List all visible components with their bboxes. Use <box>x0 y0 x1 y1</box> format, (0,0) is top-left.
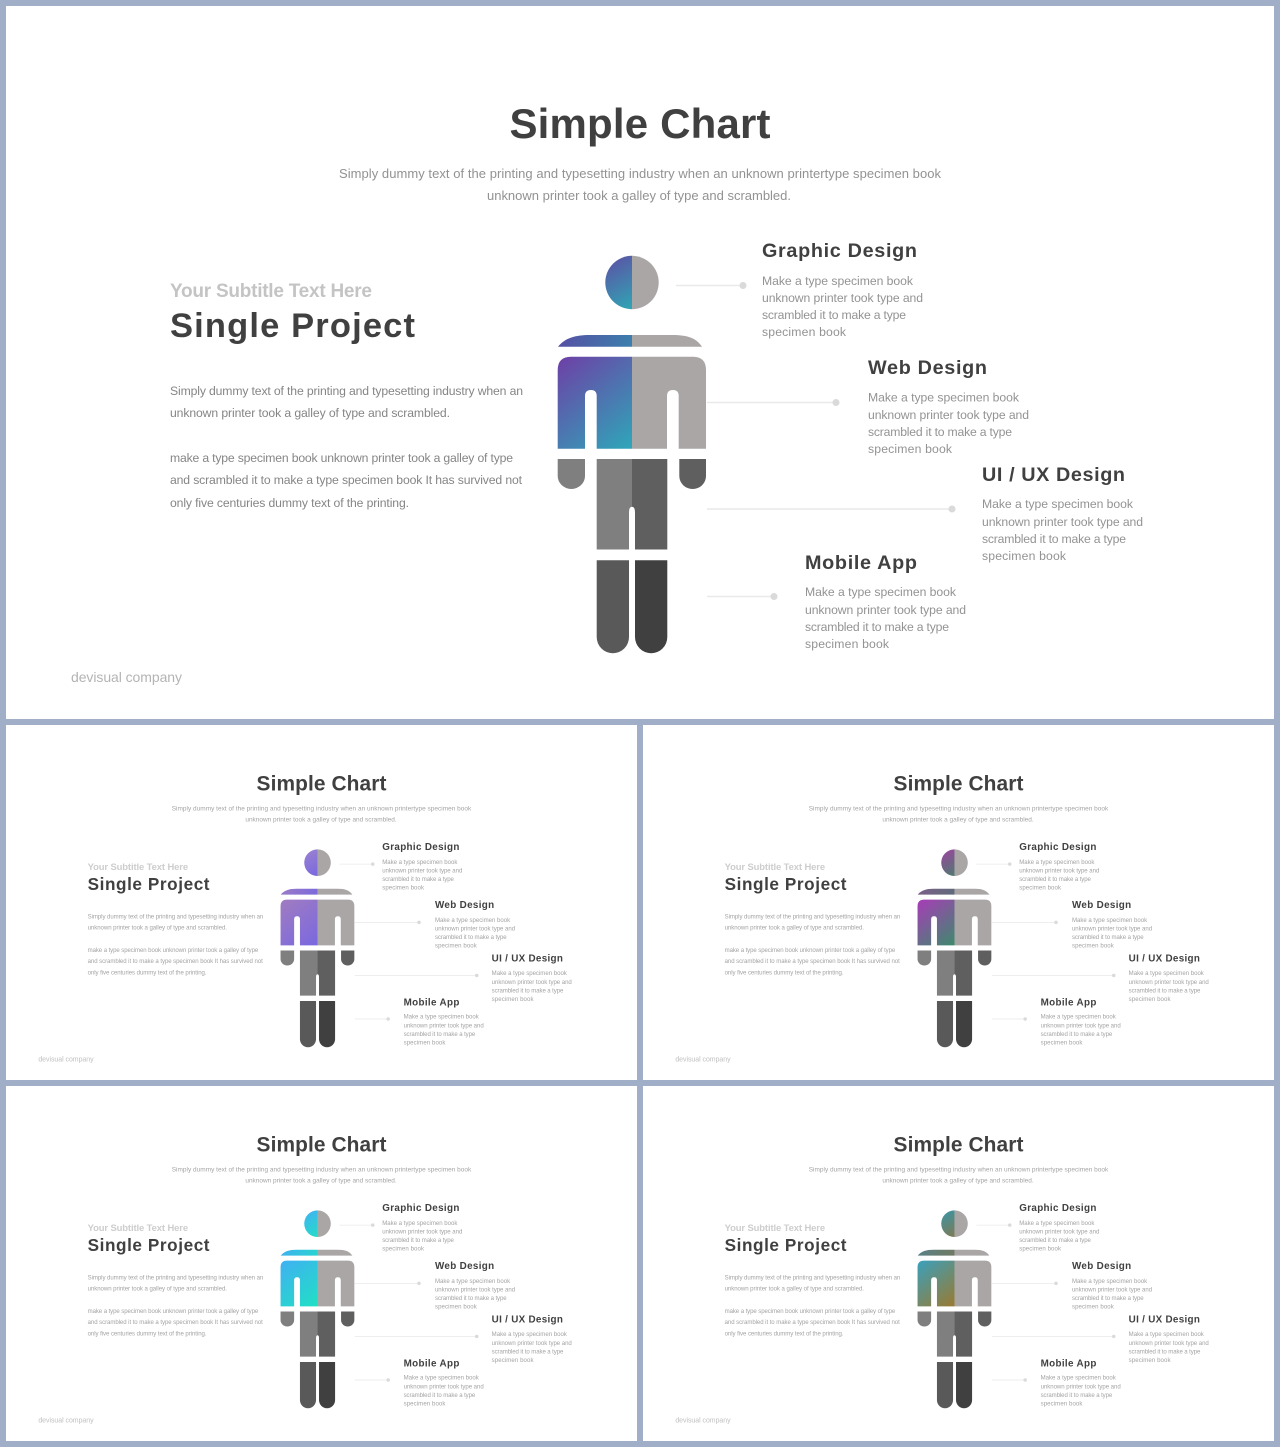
connector: mobile app <box>707 593 778 600</box>
head <box>941 849 968 876</box>
item: graphic design: specimen book <box>1019 885 1062 891</box>
panel: magenta green variant <box>643 725 1274 1080</box>
title: Simple Chart <box>257 1134 386 1157</box>
item: mobile app: Make a type specimen book <box>404 1015 480 1021</box>
item: web design: scrambled it to make a type <box>1072 935 1144 941</box>
body text <box>88 1276 263 1337</box>
item: ui ux design: scrambled it to make a type <box>1129 1349 1201 1355</box>
item: mobile app: Mobile App <box>805 552 917 574</box>
hands <box>918 951 991 965</box>
intro text: Simply dummy text of the printing and typesetting industry when an unknown printertype specimen book <box>809 1167 1109 1174</box>
human figure chart <box>918 849 991 1047</box>
connector: ui ux design <box>355 974 479 977</box>
item: mobile app: specimen book <box>1041 1041 1083 1047</box>
body text <box>170 384 523 510</box>
item: mobile app: scrambled it to make a type <box>1041 1393 1113 1399</box>
heading: single project: Single Project <box>170 307 416 345</box>
subtitle: Your Subtitle Text Here <box>170 281 372 302</box>
item: graphic design: Graphic Design <box>1019 842 1096 853</box>
human figure chart <box>281 849 354 1047</box>
item: ui ux design: Make a type specimen book <box>1129 971 1205 977</box>
body text: only five centuries dummy text of the printing. <box>88 1331 207 1337</box>
footer: devisual company <box>71 669 182 685</box>
item: graphic design: Make a type specimen book <box>1019 1221 1095 1227</box>
item: ui ux design <box>492 953 572 1003</box>
item: ui ux design: scrambled it to make a type <box>1129 988 1201 994</box>
item: web design: Web Design <box>1072 900 1131 911</box>
item: ui ux design <box>982 464 1143 563</box>
body text: and scrambled it to make a type specimen book It has survived not <box>88 1320 263 1326</box>
intro text: Simply dummy text of the printing and typesetting industry when an unknown printertype specimen book <box>172 1167 472 1174</box>
item: web design: Web Design <box>868 357 987 379</box>
item: web design: Web Design <box>435 1261 494 1272</box>
item: web design: unknown printer took type and <box>1072 1288 1152 1294</box>
item: graphic design: specimen book <box>382 885 425 891</box>
body text: unknown printer took a galley of type and scrambled. <box>725 926 864 932</box>
item: graphic design <box>762 240 923 339</box>
item: ui ux design: UI / UX Design <box>1129 1314 1200 1326</box>
item: graphic design: unknown printer took type and <box>382 868 462 874</box>
head <box>941 1210 968 1237</box>
body text <box>725 915 900 976</box>
item: mobile app: specimen book <box>805 637 890 651</box>
connector: mobile app <box>992 1378 1027 1382</box>
item: ui ux design: unknown printer took type and <box>492 980 572 986</box>
item: graphic design: scrambled it to make a type <box>1019 1238 1091 1244</box>
item: mobile app: scrambled it to make a type <box>404 1032 476 1038</box>
item: web design: Make a type specimen book <box>1072 918 1148 924</box>
hands <box>918 1312 991 1326</box>
heading: single project: Single Project <box>725 874 847 894</box>
panel: main slide <box>6 6 1274 719</box>
legs <box>937 1362 972 1408</box>
item: web design: scrambled it to make a type <box>868 425 1012 439</box>
connector: web design <box>992 921 1058 924</box>
item: mobile app: Mobile App <box>404 1358 459 1369</box>
item: mobile app: Mobile App <box>404 997 459 1008</box>
footer: devisual company <box>38 1057 94 1064</box>
item: mobile app: Make a type specimen book <box>404 1376 480 1382</box>
intro text: Simply dummy text of the printing and typesetting industry when an unknown printertype specimen book <box>339 166 942 181</box>
item: mobile app: scrambled it to make a type <box>404 1393 476 1399</box>
item: web design <box>435 1261 515 1311</box>
item: mobile app: unknown printer took type and <box>1041 1024 1121 1030</box>
item: graphic design: scrambled it to make a type <box>762 308 906 322</box>
title: Simple Chart <box>894 1134 1023 1157</box>
hips <box>597 459 667 550</box>
item: web design: specimen book <box>435 944 478 950</box>
item: mobile app: Make a type specimen book <box>1041 1015 1117 1021</box>
human figure chart <box>918 1210 991 1408</box>
connector: mobile app <box>355 1378 390 1382</box>
item: web design: scrambled it to make a type <box>1072 1296 1144 1302</box>
item: web design: Make a type specimen book <box>868 390 1020 404</box>
item: ui ux design: Make a type specimen book <box>1129 1332 1205 1338</box>
body text: and scrambled it to make a type specimen book It has survived not <box>88 959 263 965</box>
human figure chart <box>558 256 706 653</box>
subtitle: Your Subtitle Text Here <box>725 862 825 873</box>
title: Simple Chart <box>257 773 386 796</box>
body text: unknown printer took a galley of type and scrambled. <box>88 926 227 932</box>
item: web design: Make a type specimen book <box>435 918 511 924</box>
intro text <box>809 806 1109 824</box>
body text <box>88 915 263 976</box>
item: ui ux design: scrambled it to make a type <box>492 988 564 994</box>
connector: web design <box>355 921 421 924</box>
item: web design: Web Design <box>1072 1261 1131 1272</box>
item: ui ux design <box>1129 1314 1209 1364</box>
heading: single project: Single Project <box>88 874 210 894</box>
item: graphic design: unknown printer took type and <box>382 1229 462 1235</box>
connector: graphic design <box>339 1223 374 1227</box>
head <box>304 1210 331 1237</box>
title: Simple Chart <box>510 100 770 147</box>
item: web design: specimen book <box>1072 1305 1115 1311</box>
hands <box>281 1312 354 1326</box>
legs <box>937 1001 972 1047</box>
subtitle: Your Subtitle Text Here <box>88 862 188 873</box>
footer: devisual company <box>38 1418 94 1425</box>
item: web design: unknown printer took type and <box>435 1288 515 1294</box>
subtitle: Your Subtitle Text Here <box>725 1223 825 1234</box>
panel: teal amber variant <box>643 1086 1274 1441</box>
item: mobile app: Make a type specimen book <box>805 585 957 599</box>
item: graphic design: Graphic Design <box>762 240 917 262</box>
intro text: unknown printer took a galley of type and scrambled. <box>882 817 1034 824</box>
connector: graphic design <box>976 862 1011 866</box>
hands <box>281 951 354 965</box>
heading: single project: Single Project <box>88 1235 210 1255</box>
intro text: unknown printer took a galley of type and scrambled. <box>882 1178 1034 1185</box>
connector: graphic design <box>676 282 746 289</box>
item: ui ux design: specimen book <box>1129 997 1171 1003</box>
item: graphic design: unknown printer took type and <box>762 291 923 305</box>
item: graphic design: scrambled it to make a type <box>382 1238 454 1244</box>
connector: web design <box>707 399 840 406</box>
item: ui ux design: UI / UX Design <box>982 464 1125 486</box>
item: mobile app: unknown printer took type and <box>805 603 966 617</box>
hands <box>558 459 706 489</box>
human figure chart <box>281 1210 354 1408</box>
body text: Simply dummy text of the printing and typesetting industry when an <box>725 1276 900 1282</box>
body text: make a type specimen book unknown printer took a galley of type <box>725 948 896 954</box>
item: graphic design <box>1019 842 1099 891</box>
connector: web design <box>992 1282 1058 1285</box>
item: graphic design: specimen book <box>762 325 847 339</box>
panel: cyan variant <box>6 1086 637 1441</box>
hips <box>937 951 972 996</box>
torso and arms <box>281 1261 354 1306</box>
heading: single project: Single Project <box>725 1235 847 1255</box>
item: mobile app: specimen book <box>404 1402 446 1408</box>
item: mobile app <box>1041 997 1121 1047</box>
connector: mobile app <box>355 1017 390 1021</box>
item: ui ux design: specimen book <box>1129 1358 1171 1364</box>
connector: mobile app <box>992 1017 1027 1021</box>
item: mobile app: scrambled it to make a type <box>805 620 949 634</box>
item: graphic design <box>382 1203 462 1252</box>
body text: only five centuries dummy text of the printing. <box>170 496 409 510</box>
item: mobile app: Mobile App <box>1041 997 1096 1008</box>
item: mobile app: scrambled it to make a type <box>1041 1032 1113 1038</box>
item: graphic design: Graphic Design <box>1019 1203 1096 1214</box>
intro text: unknown printer took a galley of type and scrambled. <box>245 1178 397 1185</box>
torso and arms <box>918 1261 991 1306</box>
footer: devisual company <box>675 1057 731 1064</box>
body text: Simply dummy text of the printing and typesetting industry when an <box>170 384 523 398</box>
item: web design <box>435 900 515 950</box>
item: mobile app: unknown printer took type and <box>404 1385 484 1391</box>
hips <box>300 1312 335 1357</box>
legs <box>597 560 667 653</box>
item: ui ux design <box>1129 953 1209 1003</box>
body text: make a type specimen book unknown printer took a galley of type <box>88 948 259 954</box>
intro text <box>809 1167 1109 1185</box>
item: ui ux design <box>492 1314 572 1364</box>
connector: ui ux design <box>355 1335 479 1338</box>
intro text <box>339 166 942 203</box>
legs <box>300 1001 335 1047</box>
item: web design: unknown printer took type and <box>1072 927 1152 933</box>
torso and arms <box>281 900 354 945</box>
item: web design: scrambled it to make a type <box>435 1296 507 1302</box>
item: web design: scrambled it to make a type <box>435 935 507 941</box>
item: ui ux design: Make a type specimen book <box>982 497 1134 511</box>
body text: Simply dummy text of the printing and typesetting industry when an <box>88 1276 263 1282</box>
item: web design: unknown printer took type and <box>868 408 1029 422</box>
body text: make a type specimen book unknown printer took a galley of type <box>88 1309 259 1315</box>
body text: only five centuries dummy text of the printing. <box>88 970 207 976</box>
shoulders <box>918 1250 989 1256</box>
hips <box>937 1312 972 1357</box>
connector: ui ux design <box>992 974 1116 977</box>
item: graphic design: Make a type specimen book <box>1019 860 1095 866</box>
panel: violet variant <box>6 725 637 1080</box>
item: mobile app: Make a type specimen book <box>1041 1376 1117 1382</box>
item: graphic design: scrambled it to make a type <box>382 877 454 883</box>
item: graphic design: unknown printer took type and <box>1019 868 1099 874</box>
legs <box>300 1362 335 1408</box>
item: web design: Web Design <box>435 900 494 911</box>
connector: graphic design <box>976 1223 1011 1227</box>
item: ui ux design: Make a type specimen book <box>492 971 568 977</box>
item: graphic design: specimen book <box>1019 1246 1062 1252</box>
torso and arms <box>558 357 706 449</box>
intro text: Simply dummy text of the printing and typesetting industry when an unknown printertype specimen book <box>809 806 1109 813</box>
item: ui ux design: specimen book <box>492 997 534 1003</box>
item: ui ux design: unknown printer took type and <box>1129 980 1209 986</box>
connector: ui ux design <box>707 506 956 512</box>
item: web design: unknown printer took type and <box>435 927 515 933</box>
body text: and scrambled it to make a type specimen book It has survived not <box>725 1320 900 1326</box>
item: mobile app: unknown printer took type and <box>404 1024 484 1030</box>
intro text: Simply dummy text of the printing and typesetting industry when an unknown printertype specimen book <box>172 806 472 813</box>
body text: Simply dummy text of the printing and typesetting industry when an <box>88 915 263 921</box>
item: web design: specimen book <box>435 1305 478 1311</box>
item: ui ux design: scrambled it to make a type <box>492 1349 564 1355</box>
connector: web design <box>355 1282 421 1285</box>
torso and arms <box>918 900 991 945</box>
body text: Simply dummy text of the printing and typesetting industry when an <box>725 915 900 921</box>
shoulders <box>281 889 352 895</box>
item: web design: Make a type specimen book <box>1072 1279 1148 1285</box>
title: Simple Chart <box>894 773 1023 796</box>
item: graphic design: specimen book <box>382 1246 425 1252</box>
body text: make a type specimen book unknown printer took a galley of type <box>725 1309 896 1315</box>
item: web design <box>1072 1261 1152 1311</box>
item: graphic design: Make a type specimen book <box>382 1221 458 1227</box>
item: web design <box>868 357 1029 456</box>
footer: devisual company <box>675 1418 731 1425</box>
body text: only five centuries dummy text of the printing. <box>725 970 844 976</box>
item: ui ux design: scrambled it to make a type <box>982 532 1126 546</box>
body text: unknown printer took a galley of type and scrambled. <box>88 1287 227 1293</box>
item: web design <box>1072 900 1152 950</box>
item: graphic design: Make a type specimen book <box>382 860 458 866</box>
item: ui ux design: unknown printer took type and <box>982 515 1143 529</box>
item: ui ux design: UI / UX Design <box>492 1314 563 1326</box>
body text: and scrambled it to make a type specimen book It has survived not <box>170 473 523 487</box>
item: mobile app: Mobile App <box>1041 1358 1096 1369</box>
head <box>304 849 331 876</box>
shoulders <box>918 889 989 895</box>
connector: graphic design <box>339 862 374 866</box>
item: graphic design: unknown printer took type and <box>1019 1229 1099 1235</box>
item: ui ux design: specimen book <box>492 1358 534 1364</box>
item: ui ux design: UI / UX Design <box>1129 953 1200 965</box>
item: ui ux design: specimen book <box>982 549 1067 563</box>
item: graphic design: Graphic Design <box>382 1203 459 1214</box>
item: mobile app <box>1041 1358 1121 1408</box>
item: graphic design: Make a type specimen book <box>762 274 914 288</box>
item: mobile app: unknown printer took type and <box>1041 1385 1121 1391</box>
intro text: unknown printer took a galley of type and scrambled. <box>245 817 397 824</box>
body text: and scrambled it to make a type specimen book It has survived not <box>725 959 900 965</box>
item: graphic design <box>1019 1203 1099 1252</box>
hips <box>300 951 335 996</box>
item: mobile app: specimen book <box>404 1041 446 1047</box>
body text: unknown printer took a galley of type and scrambled. <box>170 406 450 420</box>
item: graphic design <box>382 842 462 891</box>
head <box>605 256 659 309</box>
shoulders <box>281 1250 352 1256</box>
subtitle: Your Subtitle Text Here <box>88 1223 188 1234</box>
item: mobile app <box>805 552 966 651</box>
connector: ui ux design <box>992 1335 1116 1338</box>
shoulders <box>558 335 702 347</box>
body text: unknown printer took a galley of type and scrambled. <box>725 1287 864 1293</box>
item: web design: Make a type specimen book <box>435 1279 511 1285</box>
item: graphic design: Graphic Design <box>382 842 459 853</box>
item: web design: specimen book <box>1072 944 1115 950</box>
item: ui ux design: UI / UX Design <box>492 953 563 965</box>
body text <box>725 1276 900 1337</box>
intro text <box>172 1167 472 1185</box>
intro text: unknown printer took a galley of type and scrambled. <box>487 188 791 203</box>
item: mobile app <box>404 1358 484 1408</box>
item: mobile app <box>404 997 484 1047</box>
item: ui ux design: unknown printer took type and <box>492 1341 572 1347</box>
item: web design: specimen book <box>868 442 953 456</box>
intro text <box>172 806 472 824</box>
body text: only five centuries dummy text of the printing. <box>725 1331 844 1337</box>
body text: make a type specimen book unknown printer took a galley of type <box>170 451 513 465</box>
item: ui ux design: Make a type specimen book <box>492 1332 568 1338</box>
item: graphic design: scrambled it to make a type <box>1019 877 1091 883</box>
item: mobile app: specimen book <box>1041 1402 1083 1408</box>
item: ui ux design: unknown printer took type and <box>1129 1341 1209 1347</box>
